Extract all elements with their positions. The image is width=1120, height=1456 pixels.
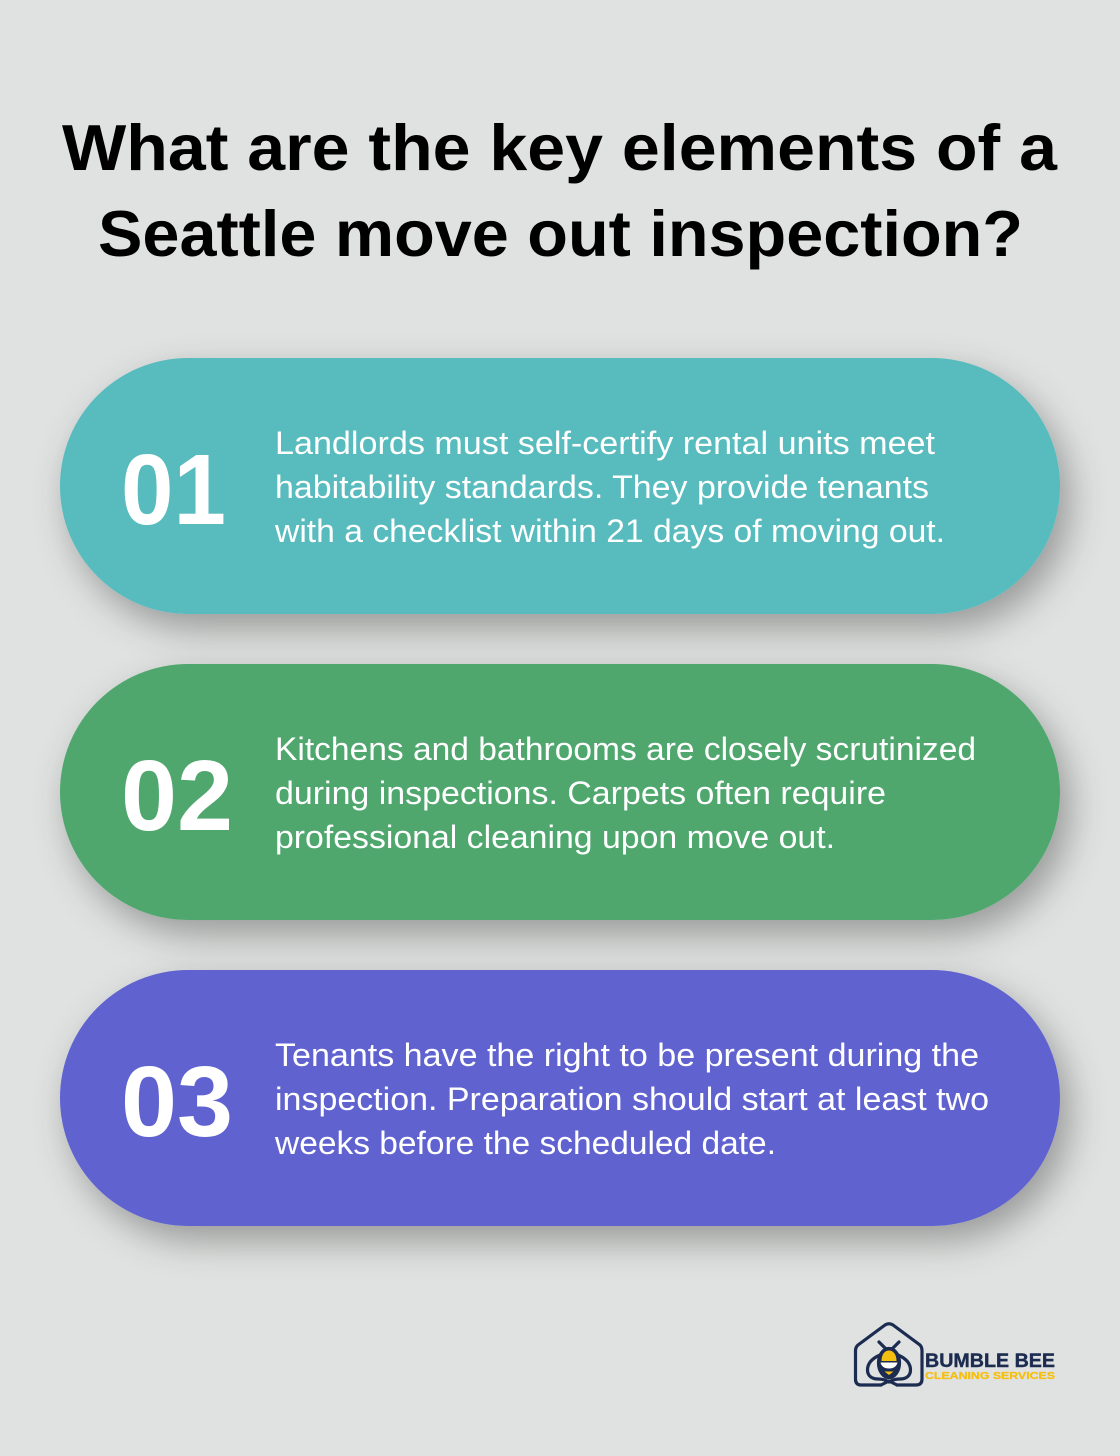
text block: step 02 (275, 731, 976, 855)
text block: step 03: inspection. Preparation should start at least two (275, 1081, 989, 1117)
number 03: 03 (121, 1046, 233, 1158)
text block: step 02: professional cleaning upon move out. (275, 819, 835, 855)
number 01: 01 (121, 434, 226, 546)
logo tagline: CLEANING SERVICES (925, 1370, 1055, 1382)
icon: house with bee (856, 1324, 922, 1385)
title (62, 111, 1058, 270)
title: Seattle move out inspection? (98, 197, 1023, 270)
text block: step 01 (274, 425, 945, 549)
text block: step 03: Tenants have the right to be present during the (275, 1037, 979, 1073)
text block: step 03 (274, 1037, 989, 1161)
number 02: 02 (121, 740, 233, 852)
logo: Bumble Bee Cleaning Services (856, 1324, 1055, 1385)
text block: step 01: Landlords must self-certify rental units meet (275, 425, 935, 461)
text block: step 02: during inspections. Carpets often require (275, 775, 886, 811)
panel: step 03 (60, 970, 1060, 1226)
logo wordmark: BUMBLE BEE (925, 1350, 1055, 1372)
title: What are the key elements of a (62, 111, 1058, 184)
text block: step 02: Kitchens and bathrooms are closely scrutinized (275, 731, 976, 767)
text block: step 01: habitability standards. They provide tenants (275, 469, 929, 505)
panel: step 01 (60, 358, 1060, 614)
panel: step 02 (60, 664, 1060, 920)
text block: step 03: weeks before the scheduled date. (274, 1125, 776, 1161)
text block: step 01: with a checklist within 21 days of moving out. (274, 513, 945, 549)
